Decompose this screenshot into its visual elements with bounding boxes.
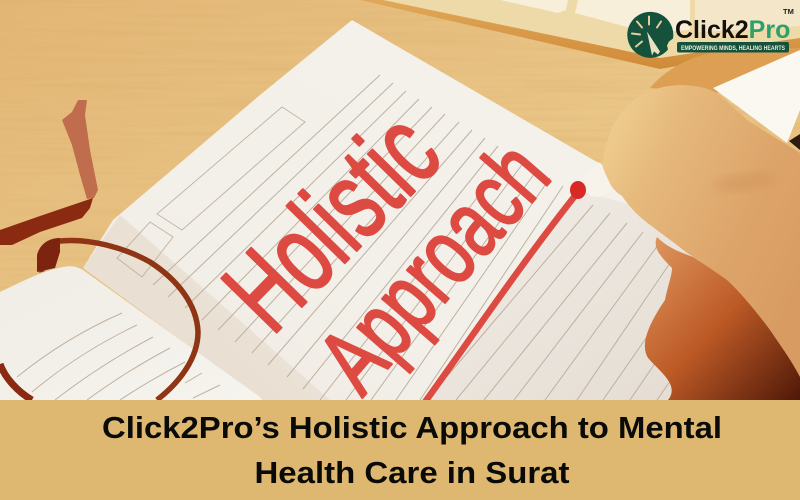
notebook right page: [83, 20, 720, 400]
key 1: [500, 0, 568, 13]
open notebook: [0, 20, 720, 411]
title line 2: Health Care in Surat: [254, 455, 570, 490]
gutter shadow on right page: [83, 215, 330, 400]
handwritten word: Approach: Approach: [298, 122, 569, 411]
Click2Pro logo: [627, 7, 794, 58]
handwritten word: Holistic: Holistic: [200, 89, 463, 354]
keyboard frame: [383, 0, 800, 58]
logo dial icon: [627, 12, 673, 58]
marker body: [713, 50, 800, 143]
marker tip barrel: [583, 162, 613, 197]
hand holding marker: [570, 48, 800, 400]
logo tagline: [677, 42, 789, 52]
title banner: [0, 400, 800, 500]
ribbon fold: [37, 238, 60, 272]
lower fingers: [645, 237, 800, 400]
ribbon lower end: [0, 364, 32, 400]
trademark: TM: [783, 7, 794, 16]
key alt: [695, 0, 800, 32]
ribbon loop: [41, 240, 198, 400]
red underline stroke: [425, 192, 578, 402]
printed boxes on the page: [117, 107, 305, 277]
key 2: [575, 0, 690, 32]
notebook left page: [0, 266, 262, 400]
ruled lines on the right page: [153, 75, 720, 400]
wooden table background: [0, 0, 800, 400]
knuckle crease: [712, 170, 778, 194]
upper finger behind marker: [650, 48, 800, 93]
ruled lines on the left page: [17, 313, 220, 400]
logo wordmark: Click2Pro: [675, 16, 790, 44]
bookmark ribbon: [0, 100, 198, 400]
title line 1: Click2Pro’s Holistic Approach to Mental: [102, 410, 722, 445]
marker red nib: [570, 181, 586, 199]
keyboard rim: [360, 0, 800, 69]
logo tagline: EMPOWERING MINDS, HEALING HEARTS: [681, 46, 785, 52]
back of hand: [602, 85, 800, 377]
ribbon flat band: [0, 198, 93, 245]
keyboard at top: [360, 0, 800, 69]
lower right page shaded area: [425, 190, 720, 400]
ribbon frayed end: [62, 100, 98, 199]
marker shadow: [789, 134, 800, 150]
